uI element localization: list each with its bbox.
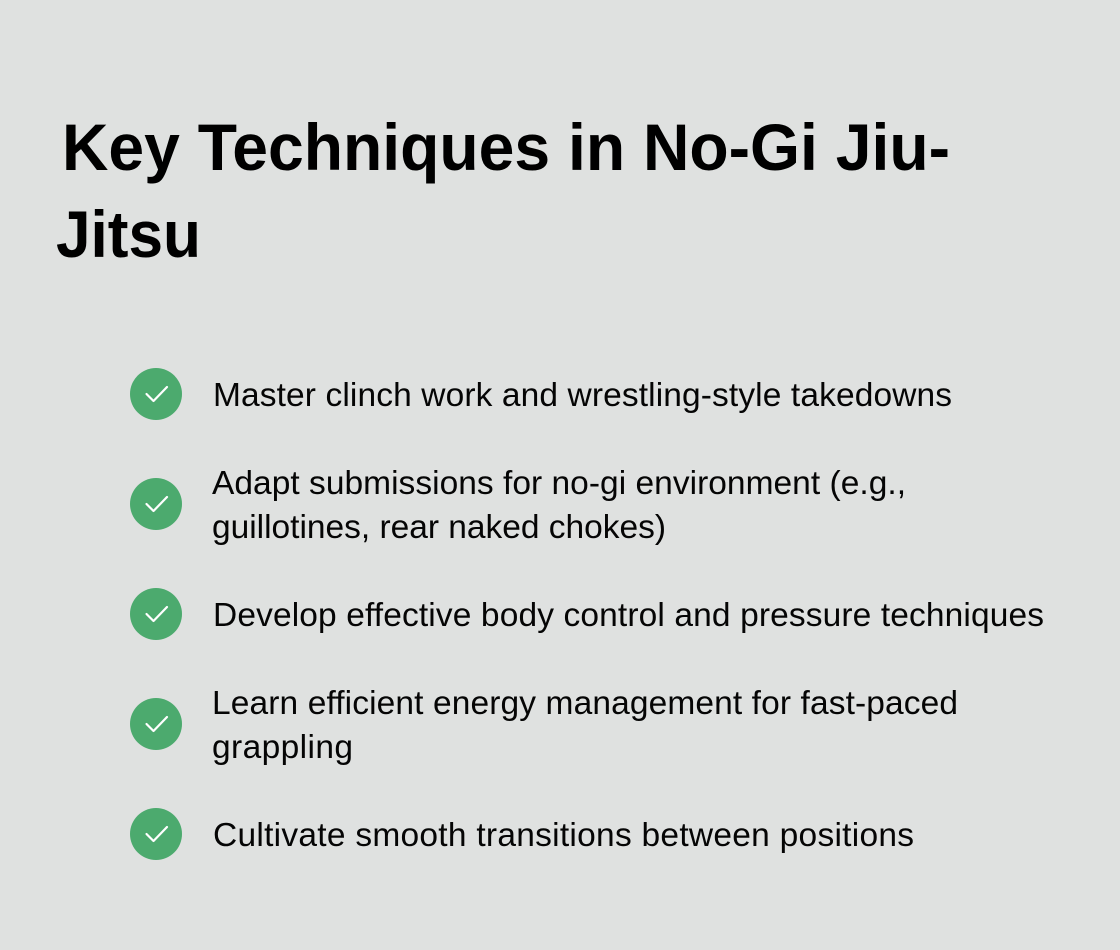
text: item 4: grappling <box>212 729 353 766</box>
icon: check 3 <box>130 588 182 640</box>
title: Jitsu <box>56 197 201 271</box>
item 1 <box>130 368 952 420</box>
text: item 4: Learn efficient energy management for fast-paced <box>212 685 958 722</box>
icon: check 1 <box>130 368 182 420</box>
text: item 5: Cultivate smooth transitions between positions <box>213 817 914 854</box>
text: item 2 <box>212 465 906 546</box>
icon: check 2 <box>130 478 182 530</box>
title: Key Techniques in No-Gi Jiu- <box>62 110 950 184</box>
text: item 4 <box>212 685 958 766</box>
checklist <box>130 368 1044 860</box>
text: item 3: Develop effective body control and pressure techniques <box>213 597 1044 634</box>
icon: check 5 <box>130 808 182 860</box>
text: item 2: guillotines, rear naked chokes) <box>212 509 666 546</box>
item 4 <box>130 685 958 766</box>
item 5 <box>130 808 914 860</box>
title <box>56 110 950 271</box>
text: item 1: Master clinch work and wrestling-style takedowns <box>213 377 952 414</box>
text: item 2: Adapt submissions for no-gi environment (e.g., <box>212 465 906 502</box>
icon: check 4 <box>130 698 182 750</box>
item 2 <box>130 465 906 546</box>
item 3 <box>130 588 1044 640</box>
